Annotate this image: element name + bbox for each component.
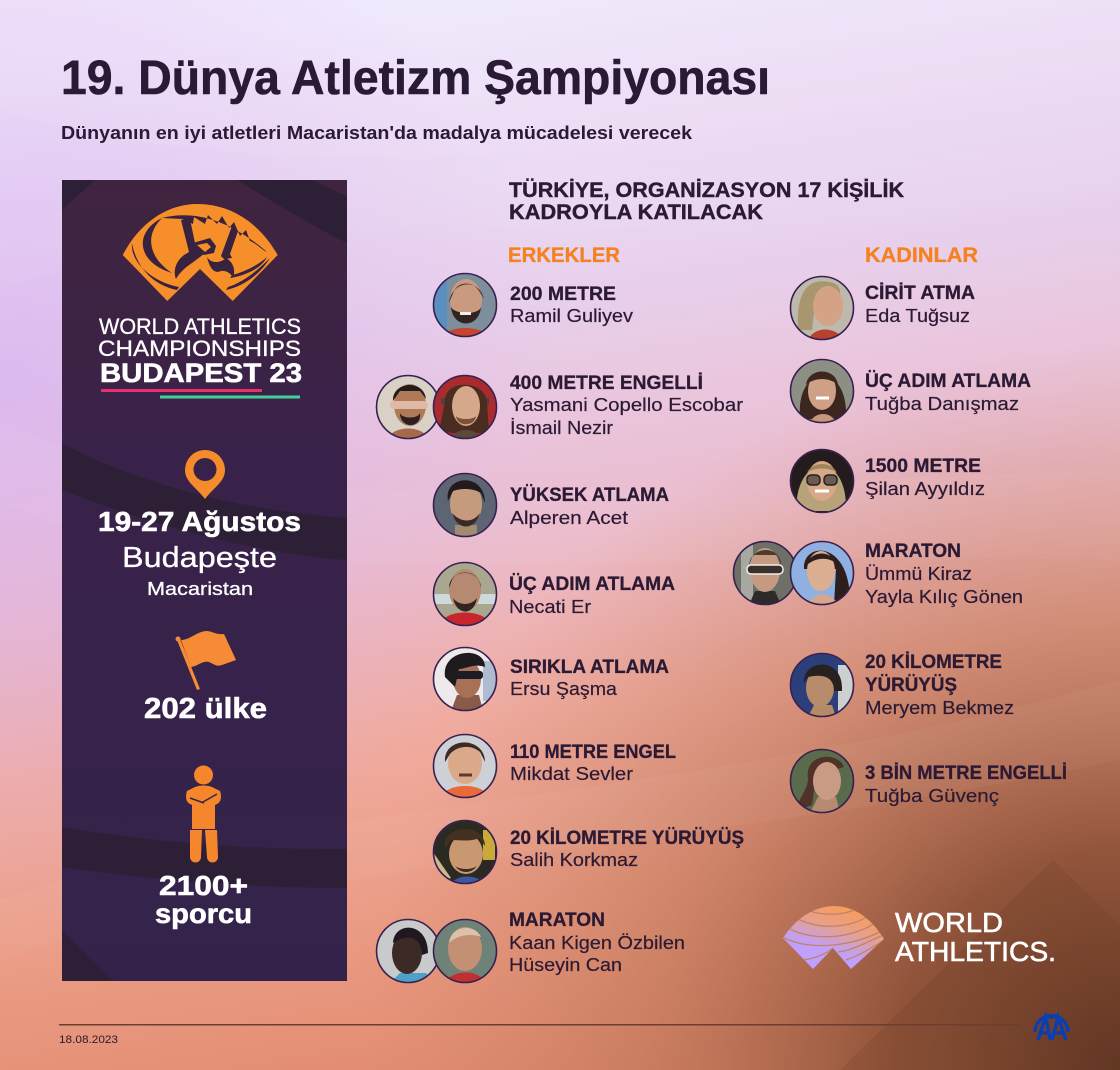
entry: 1500 metre: Şilan Ayyıldız bbox=[865, 479, 985, 499]
entry: javelin bbox=[790, 276, 975, 340]
entry: 200 metre: Ramil Guliyev bbox=[510, 306, 633, 326]
entry: triple jump men: ÜÇ ADIM ATLAMA bbox=[509, 574, 675, 595]
entry: marathon women: Ümmü Kiraz bbox=[865, 564, 972, 584]
entry: 1500 metre: 1500 METRE bbox=[865, 456, 981, 477]
entry: high jump bbox=[433, 473, 669, 539]
logo text: World Athletics Championships bbox=[98, 314, 302, 398]
entry: 400 metre hurdles: Yasmani Copello Escobar bbox=[510, 395, 743, 415]
entry: 20 km walk women: Meryem Bekmez bbox=[865, 698, 1014, 718]
entry: 20 km walk men bbox=[433, 820, 744, 884]
heading: Turkey squad bbox=[509, 179, 904, 224]
date and location text bbox=[98, 506, 301, 599]
entry: triple jump women: ÜÇ ADIM ATLAMA bbox=[865, 371, 1031, 392]
stat: countries: 202 ülke bbox=[144, 693, 267, 725]
entry: 110 metre hurdles: Mikdat Sevler bbox=[510, 764, 633, 784]
stat: athletes: 2100+ bbox=[159, 870, 248, 901]
heading: women: KADINLAR bbox=[865, 244, 978, 267]
entry: marathon women: Yayla Kılıç Gönen bbox=[865, 587, 1023, 607]
entry: 3000 metre steeplechase bbox=[790, 749, 1067, 813]
entry: marathon women: MARATON bbox=[865, 541, 961, 562]
logo: Anadolu Agency bbox=[1035, 1015, 1068, 1040]
entry: 20 km walk women: 20 KİLOMETRE bbox=[865, 652, 1002, 673]
entry: 400 metre hurdles bbox=[376, 373, 743, 439]
icon: flag bbox=[176, 631, 236, 690]
entry: 1500 metre bbox=[790, 449, 985, 513]
entry: high jump: YÜKSEK ATLAMA bbox=[510, 485, 669, 506]
entry: javelin: Eda Tuğsuz bbox=[865, 306, 970, 326]
date and location text: Macaristan bbox=[147, 579, 253, 599]
logo: World Athletics bbox=[780, 904, 1056, 972]
logo text: World Athletics Championships: CHAMPIONSHIPS bbox=[98, 336, 301, 361]
heading: men: ERKEKLER bbox=[508, 244, 620, 267]
entry: 200 metre bbox=[433, 273, 633, 337]
entry: marathon men: Hüseyin Can bbox=[509, 955, 622, 975]
entry: triple jump women: Tuğba Danışmaz bbox=[865, 394, 1019, 414]
entry: pole vault: Ersu Şaşma bbox=[510, 679, 618, 699]
entry: triple jump women bbox=[790, 359, 1031, 423]
logo: World Athletics: WORLD bbox=[895, 907, 1003, 938]
entry: 200 metre: 200 METRE bbox=[510, 284, 616, 305]
logo: World Athletics: ATHLETICS. bbox=[895, 936, 1056, 967]
subtitle: Dünyanın en iyi atletleri Macaristan'da madalya mücadelesi verecek bbox=[61, 123, 693, 143]
entry: high jump: Alperen Acet bbox=[510, 508, 628, 528]
entry: pole vault: SIRIKLA ATLAMA bbox=[510, 657, 669, 678]
entry: marathon men: MARATON bbox=[509, 910, 605, 931]
footer rule bbox=[59, 1024, 1020, 1026]
entry: pole vault bbox=[433, 647, 669, 711]
entry: 400 metre hurdles: 400 METRE ENGELLİ bbox=[510, 373, 703, 394]
logo text: World Athletics Championships: WORLD ATHLETICS bbox=[99, 314, 301, 339]
entry: 3000 metre steeplechase: Tuğba Güvenç bbox=[865, 786, 999, 806]
entry: 3000 metre steeplechase: 3 BİN METRE ENGELLİ bbox=[865, 763, 1067, 784]
entry: javelin: CİRİT ATMA bbox=[865, 283, 975, 304]
stat: athletes: sporcu bbox=[155, 898, 252, 929]
date and location text: Budapeşte bbox=[122, 542, 277, 574]
title: 19. Dünya Atletizm Şampiyonası bbox=[61, 52, 770, 105]
entry: 110 metre hurdles: 110 METRE ENGEL bbox=[510, 742, 676, 763]
icon: athlete figure bbox=[186, 766, 221, 863]
heading: Turkey squad: TÜRKİYE, ORGANİZASYON 17 KİŞİLİK bbox=[509, 179, 904, 202]
entry: 20 km walk men: Salih Korkmaz bbox=[510, 850, 638, 870]
stat: athletes bbox=[155, 870, 252, 929]
entry: 20 km walk women: YÜRÜYÜŞ bbox=[865, 675, 957, 696]
entry: 20 km walk women bbox=[790, 652, 1014, 718]
date: 18.08.2023 bbox=[59, 1034, 118, 1046]
entry: marathon men: Kaan Kigen Özbilen bbox=[509, 933, 685, 953]
icon: championships logo bbox=[123, 204, 278, 301]
heading: Turkey squad: KADROYLA KATILACAK bbox=[509, 201, 763, 224]
entry: 400 metre hurdles: İsmail Nezir bbox=[510, 418, 613, 438]
entry: triple jump men: Necati Er bbox=[509, 597, 591, 617]
entry: triple jump men bbox=[433, 562, 675, 626]
entry: marathon men bbox=[376, 910, 685, 983]
entry: 110 metre hurdles bbox=[433, 734, 676, 798]
date and location text: 19-27 Ağustos bbox=[98, 506, 301, 537]
entry: 20 km walk men: 20 KİLOMETRE YÜRÜYÜŞ bbox=[510, 828, 744, 849]
panel: event facts bbox=[62, 180, 347, 981]
entry: marathon women bbox=[733, 541, 1023, 607]
icon: location pin bbox=[185, 450, 225, 499]
logo text: World Athletics Championships: BUDAPEST 23 bbox=[100, 358, 302, 388]
